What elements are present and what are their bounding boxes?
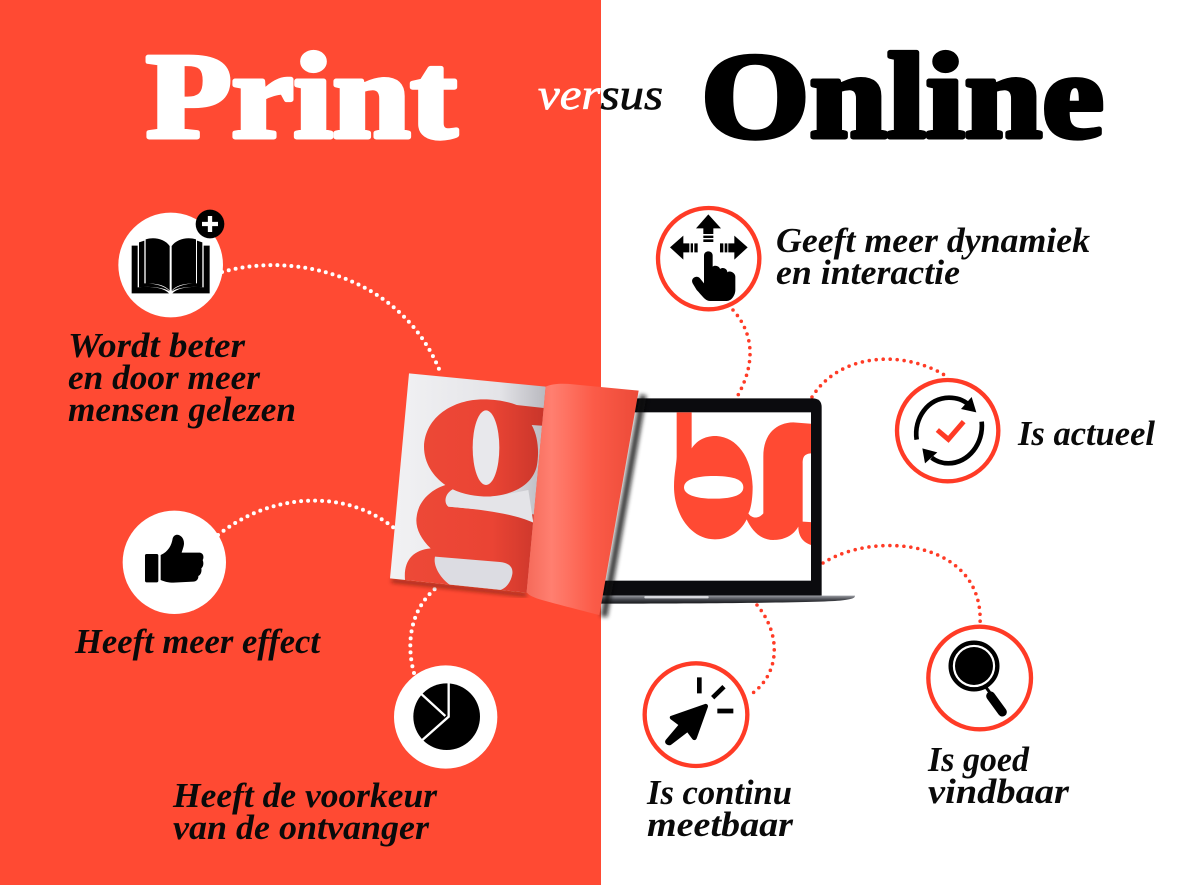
open book glyph — [132, 238, 210, 293]
magazine — [390, 373, 643, 617]
icon: thumbs up — [123, 511, 226, 614]
label: heeft de voorkeur: Heeft de voorkeur — [172, 776, 437, 815]
label: is goed vindbaar: Is goed — [927, 740, 1029, 779]
laptop — [593, 398, 855, 604]
label: geeft meer dynamiek: en interactie — [776, 253, 960, 292]
label: wordt beter: en door meer — [68, 358, 260, 397]
connector: magnifier to laptop — [823, 546, 980, 625]
label: geeft meer dynamiek: Geeft meer dynamiek — [776, 221, 1091, 260]
connector: book to magazine — [222, 265, 441, 374]
label: is goed vindbaar: vindbaar — [928, 772, 1069, 811]
label: heeft meer effect: Heeft meer effect — [74, 622, 321, 661]
title: versus: versus — [538, 72, 663, 119]
label: heeft de voorkeur: van de ontvanger — [173, 808, 429, 847]
connector: thumb to magazine — [218, 501, 394, 535]
icon: touch hand with arrows — [658, 208, 759, 309]
central illustration: magazine and laptop — [390, 373, 855, 617]
label: is continu meetbaar: Is continu — [646, 773, 792, 812]
connector: sync to laptop — [812, 359, 946, 397]
icon: book with plus — [118, 210, 224, 317]
connector: cursor to laptop — [750, 605, 774, 695]
icon: sync with check — [897, 380, 998, 481]
label: wordt beter: mensen gelezen — [68, 390, 296, 429]
label: wordt beter: Wordt beter — [68, 326, 245, 365]
panel: online background — [601, 0, 1200, 885]
title: Print: Print — [146, 29, 457, 164]
connector: hand to laptop — [733, 310, 750, 397]
title: Online: Online — [701, 29, 1104, 164]
icon: pie chart — [394, 665, 497, 769]
label: is actueel: Is actueel — [1017, 414, 1155, 453]
icon: magnifier — [928, 627, 1031, 729]
connector: pie to magazine — [410, 585, 440, 673]
icon: click cursor — [645, 663, 747, 766]
panel: print background — [0, 0, 601, 885]
plus badge — [196, 210, 224, 238]
label: is continu meetbaar: meetbaar — [647, 805, 793, 844]
